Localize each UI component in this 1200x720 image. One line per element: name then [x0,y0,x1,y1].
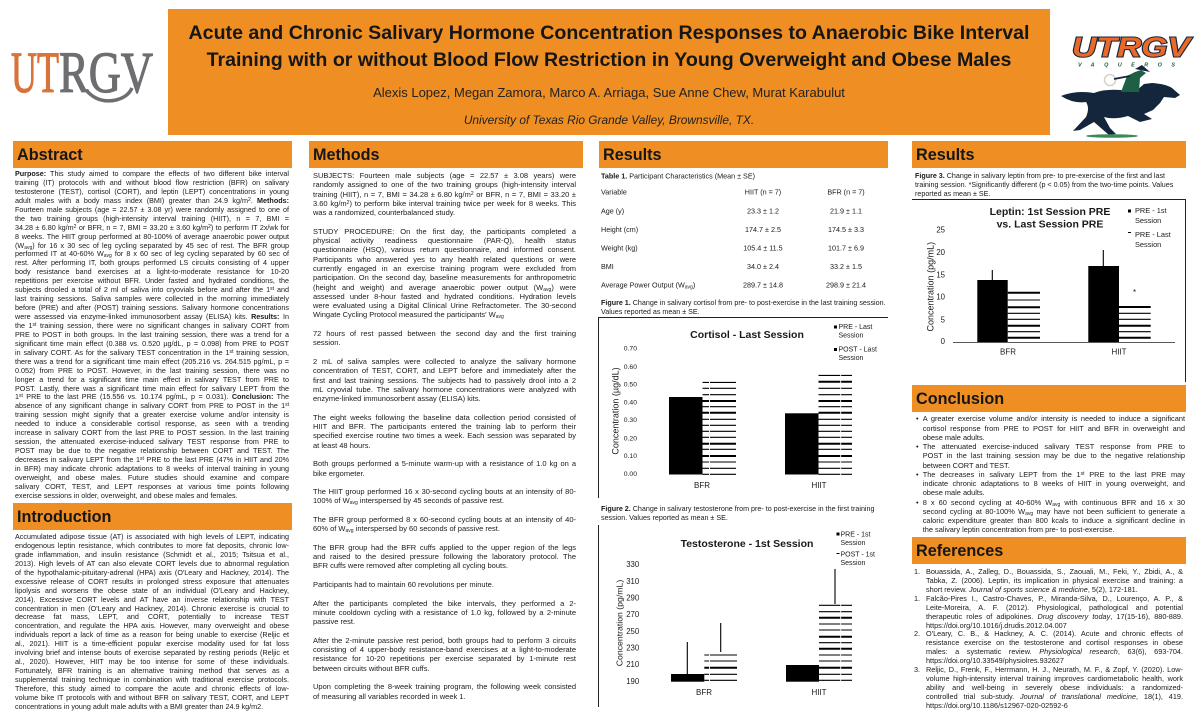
table: participant characteristics: ) [693,280,695,290]
methods text: session. [313,338,341,347]
abstract text: Purpose: This study aimed to compare the effects of two different bike interval [15,169,289,178]
methods text: minute cooldown cycling with a resistance of 1.0 kg, followed by a 2-minute [313,608,576,617]
methods text: 3.60 kg/m2) to perform bike interval training twice per week for 8 weeks. This [313,199,576,208]
chart: cortisol last session: PRE - Last [838,324,872,331]
panel: references [912,537,1186,710]
table: participant characteristics: Height (cm) [601,225,638,234]
abstract text: exercise sessions in older, overweight, and obese males and females. [15,491,238,500]
conclusion bullets: • [916,414,919,423]
conclusion bullets: obese male adults. [923,433,985,442]
heading: abstract [13,141,292,168]
heading: conclusion [912,385,1186,412]
introduction text: involving brief and intense bouts of exercise separated by resting periods (Reljic et [15,648,289,657]
title banner [168,9,1050,135]
methods text: Upon completing the 8-week training program, the following week consisted [313,682,576,691]
heading: abstract: Abstract [17,146,83,164]
abstract text: salivary CORT, TEST, and LEPT responses at various time points following [15,482,289,491]
table: participant characteristics: 105.4 ± 11.5 [743,244,783,252]
heading: introduction [13,503,292,530]
methods text: (height and weight) and average anaerobic power output (Wavg) were [313,283,576,293]
chart: cortisol last session: Session [838,332,864,340]
reference list: O'Leary, C. B., & Hackney, A. C. (2014). Acute and chronic effects of [926,629,1183,638]
methods text: between circuits without BFR cuffs. [313,664,430,673]
table: participant characteristics [601,172,866,290]
introduction text: lipolysis and worsens the obese state of an individual (O'Leary and Hackney, [15,586,289,595]
conclusion bullets: POST in the last training session may be due to the negative relationship [923,451,1185,460]
poster title: Training with or without Blood Flow Restriction in Young Overweight and Obese Males [207,48,1011,70]
chart: cortisol last session: Concentration (µg/dL) [610,367,620,455]
reference list: Bouassida, A., Zalleg, D., Bouassida, S., Zaouali, M., Feki, Y., Zbidi, A., & [926,567,1183,576]
chart: testosterone first session: 210 [626,660,640,669]
caption: figure 2: session. Values reported as mean ± SE. [601,514,728,522]
panel: introduction [13,503,292,711]
conclusion bullets: between CORT and TEST. [923,461,1010,470]
heading: methods: Methods [313,146,380,164]
abstract text: session, the attenuated exercise-induced salivary TEST response from PRE to [15,437,289,446]
introduction text: decrease fat mass, LEPT, and CORT, potentially to increase TEST [15,612,289,621]
heading: references: References [916,542,1003,560]
methods text [313,171,576,701]
abstract text: repetitions per exercise without BFR. Under fasted and hydrated conditions, the [15,276,289,285]
reference list: 1. [914,567,920,576]
heading: results (figure 3) [912,141,1186,168]
chart: leptin first vs last session: Session [1135,240,1161,249]
table: participant characteristics: Age (y) [601,206,624,216]
reference list: Falcão-Pires I., Castro-Chaves, P., Miranda-Silva, D., Lourenço, A. P., & [926,594,1183,603]
methods text: physical activity readiness questionnaire (PAR-Q), health status [313,236,576,245]
chart: cortisol last session: BFR [694,481,710,490]
abstract text: body resistance band exercises at a light-to-moderate resistance for 10-20 [15,267,289,276]
methods text: STUDY PROCEDURE: On the first day, the participants completed a [313,227,576,236]
heading: conclusion: Conclusion [916,390,1004,408]
chart: testosterone first session: BFR [696,688,712,697]
table: participant characteristics: 34.0 ± 2.4 [747,262,779,271]
caption: figure 1: Figure 1. Change in salivary cortisol from pre- to post-exercise in the last training session. [601,298,886,306]
methods text: of measuring all variables recorded in week 1. [313,692,466,701]
conclusion bullets: • [916,470,919,479]
abstract text: 34.28 ± 6.80 kg/m2 or BFR, n = 7, BMI = 33.20 ± 3.60 kg/m2) to perform IT 2x/wk for [15,223,289,232]
caption: figure 2 [601,504,874,522]
logo: UTRGV wordmark [11,46,153,105]
poster title: Acute and Chronic Salivary Hormone Concentration Responses to Anaerobic Bike Interval [189,22,1029,44]
chart: testosterone first session: PRE - 1st [840,532,871,538]
reference list: therapeutic roles of adipokines. Drug discovery today, 17(15-16), 880-889. [926,612,1183,621]
table: participant characteristics: 23.3 ± 1.2 [747,206,779,216]
chart: cortisol last session: 0.20 [624,436,637,442]
chart: leptin first vs last session: Leptin: 1st Session PRE [990,206,1110,218]
methods text: first and last training sessions. The subjects had to passively drool into a 2 [313,376,576,385]
reference list: resistance exercise on the testosterone and cortisol responses in obese [926,638,1183,647]
conclusion bullets: The attenuated exercise-induced salivary TEST response from PRE to [923,442,1185,451]
table: participant characteristics: BFR (n = 7) [827,188,865,196]
methods text: concentration of TEST, CORT, and LEPT before and immediately after the [313,366,576,375]
methods text: SUBJECTS: Fourteen male subjects (age = 22.57 ± 3.08 years) were [313,171,576,180]
chart: cortisol last session: 0.10 [624,453,637,460]
conclusion bullets: caloric expenditure greater than 800 kcals to induce a significant decline in [923,516,1185,525]
methods text: participation. On the second day, baseline measurements for anthropometric [313,273,576,282]
caption: figure 1 [601,298,886,316]
introduction text: endogenous leptin resistance, which contributes to more fat deposits, chronic low- [15,541,289,550]
introduction text: Fortunately, BFR training is an alternative training method that serves as a [15,666,289,675]
introduction text [15,532,289,711]
introduction text: 2013). High levels of AT can also elevate CORT levels due to abnormal regulation [15,559,289,568]
logo: UTRGV Vaqueros horse and rider: UTRGV [1072,32,1193,62]
chart: cortisol last session: Session [838,355,864,362]
abstract text: longer a trend for a significant time main effect in salivary TEST from PRE to [15,375,289,384]
chart: cortisol last session: 0.30 [624,417,637,424]
methods text: resistance for 10-20 repetitions per exercise separated by 1-minute rest [313,654,576,663]
table: participant characteristics: 289.7 ± 14.8 [743,280,783,290]
abstract text: 8 weeks. The HIIT group performed at 80-100% of average anaerobic power output [15,232,289,241]
chart: leptin first vs last session: HIIT [1111,348,1127,356]
chart: testosterone first session [598,525,875,707]
abstract text: overweight, and obese males. Future studies should examine and compare [15,473,289,482]
abstract text: needed to induce a considerable cortisol response, as seen with a trending [15,419,289,428]
chart: testosterone first session: Concentration (pg/mL) [614,580,624,666]
methods text: and raised to the desired pressure following the laboratory protocol. The [313,552,576,561]
introduction text: grade inflammation, and insulin resistance (Schmidt et al., 2015; Tsitsua et al., [15,550,289,559]
abstract text: before (PRE) and after (POST) training sessions. Salivary hormone concentrations [15,303,289,312]
reference list: males: a systematic review. Physiological research, 63(6), 693-704. [926,647,1183,656]
methods text: enzyme-linked immunosorbent assay (ELISA) kits. [313,394,481,403]
reference list: ability and well-being in severely obese individuals: a randomized- [926,683,1183,692]
methods text: 72 hours of rest passed between the second day and the first training [313,329,576,338]
introduction text: individuals report a lack of time as a reason for being unable to exercise (Reljic et [15,630,289,639]
methods text: at least 48 hours. [313,441,371,450]
chart: cortisol last session [598,317,888,498]
chart: testosterone first session: Testosterone - 1st Session [681,538,813,550]
abstract text: adult males with a body mass index (BMI) greater than 24.9 kg/m2. Methods: [15,196,289,205]
chart: cortisol last session: 0.00 [624,471,637,478]
conclusion bullets: indicate chronic adaptations to 8 weeks of HIIT in young overweight, and [923,479,1185,488]
reference list: Reljic, D., Frenk, F., Herrmann, H. J., Neurath, M. F., & Zopf, Y. (2020). Low- [926,665,1183,674]
methods text: BFR cuffs were removed after completing all cycling bouts. [313,561,508,570]
heading: results (table and figures 1-2): Results [603,146,661,164]
chart: leptin first vs last session: Concentration (pg/mL) [926,242,936,331]
reference list: https://doi.org/10.1186/s12967-020-02592-6 [926,701,1068,710]
chart: cortisol last session: 0.50 [624,382,637,388]
introduction text: Therefore, this study aimed to compare the acute and chronic effects of low- [15,684,289,693]
abstract text: Fourteen male subjects (age = 22.57 ± 3.08 yr) were randomly assigned to one of [15,205,289,214]
table: participant characteristics: 21.9 ± 1.1 [830,206,862,216]
reference list: volume high-intensity interval training improves cardiometabolic health, work [926,674,1183,683]
chart: testosterone first session: 270 [626,610,640,619]
table: participant characteristics: Average Power Output (W [601,280,685,290]
reference list: Leite-Moreira, A. F. (2012). Physiological, pathological and potential [926,603,1183,612]
table: participant characteristics: 33.2 ± 1.5 [830,262,862,271]
conclusion bullets: second cycling at 80-100% Wavg may have not been sufficient to generate a [923,507,1185,517]
chart: testosterone first session: 190 [626,677,640,686]
abstract text: increase in salivary CORT from the last PRE to POST session. In the last training [15,428,289,437]
conclusion bullets [916,414,1185,534]
reference list: Tabka, Z. (2006). Leptin, its implication in physical exercise and training: a [926,576,1183,585]
methods text: questionnaire (HSQ), various return questionnaire, and informed consent. [313,245,576,254]
methods text: training (HIIT), n = 7, BMI = 34.28 ± 6.80 kg/m2 or BFR, n = 7, BMI = 33.20 ± [313,190,576,199]
abstract text: rest. After performing IT, both groups performed LS circuits consisting of 4 upper [15,258,289,267]
methods text: Participants who answered yes to any health related questions or were [313,255,576,264]
chart: cortisol last session: HIIT [811,481,827,490]
chart: cortisol last session: 0.60 [624,364,637,371]
chart: testosterone first session: POST - 1st [840,552,875,558]
table: participant characteristics: BMI [601,262,614,271]
chart: leptin first vs last session: vs. Last Session PRE [997,218,1103,230]
caption: figure 2: Figure 2. Change in salivary testosterone from pre- to post-exercise in the first training [601,504,874,512]
chart: leptin first vs last session: 5 [941,316,946,324]
table: participant characteristics: 298.9 ± 21.4 [826,280,866,290]
chart: cortisol last session: 0.70 [624,346,637,352]
methods text: currently engaged in an exercise training program were excluded from [313,264,576,273]
introduction text: al., 2021). HIIT is a time-efficient popular exercise modality used for fat loss [15,639,289,648]
chart: leptin first vs last session [912,199,1186,382]
introduction text: Accumulated adipose tissue (AT) is associated with high levels of LEPT, indicating [15,532,289,541]
panel: abstract [13,141,292,500]
panel: methods [309,141,583,701]
chart: leptin first vs last session: BFR [1000,348,1016,356]
chart: testosterone first session: 250 [626,627,640,636]
methods text: was a randomized, counterbalanced study. [313,208,455,217]
chart: leptin first vs last session: PRE - 1st [1135,206,1167,215]
abstract text: 0.052) from PRE to POST. However, in the last training session, there was no [15,366,289,375]
heading: methods [309,141,583,168]
heading: references [912,537,1186,564]
methods text: assessed under 8-hour fasted and hydrated conditions. Hydration levels [313,292,576,301]
conclusion bullets: cortisol response from PRE to POST for HIIT and BFR in overweight and [923,424,1185,433]
introduction text: excessive release of CORT results in prolonged stress exposure that attenuates [15,577,289,586]
table: participant characteristics: Table 1. Participant Characteristics (Mean ± SE) [601,172,755,180]
reference list: short review. Journal of sports science & medicine, 5(2), 172-181. [926,585,1138,594]
panel: conclusion [912,385,1186,534]
chart: testosterone first session: HIIT [811,688,827,697]
methods text: HIIT and BFR. The participants entered the training lab to perform their [313,422,576,431]
table: participant characteristics: 101.7 ± 6.9 [828,244,864,252]
heading: introduction: Introduction [17,508,111,526]
reference list: https://doi.org/10.1016/j.drudis.2012.04.007 [926,621,1067,630]
methods text: The BFR group performed 8 x 60-second cycling bouts at an intensity of 40- [313,515,576,524]
methods text: The HIIT group performed 16 x 30-second cycling bouts at an intensity of 80- [313,487,576,496]
heading: results (table and figures 1-2) [599,141,888,168]
abstract text: 1st PRE to the last PRE (15.556 vs. 10.174 pg/mL, p = 0.031). Conclusion: The [15,392,289,401]
table: participant characteristics: avg [685,284,693,290]
methods text: 100% of Wavg interspersed by 45 seconds of passive rest. [313,496,504,506]
table: participant characteristics: HIIT (n = 7) [745,188,781,196]
abstract text: the 1st training session, there were no significant changes in salivary CORT from [15,321,289,330]
abstract text: the two training groups (high-intensity interval training (HIIT), n = 7, BMI = [15,214,289,223]
table: participant characteristics: 174.7 ± 2.5 [745,225,781,234]
logo: UTRGV Vaqueros horse and rider: VAQUEROS [1078,62,1175,68]
caption: figure 3: reported as mean ± SE. [915,190,990,198]
conclusion bullets: obese male adults. [923,488,985,497]
methods text: mL cryovial tube. The salivary hormone concentrations were analyzed with [313,385,576,394]
abstract text: training (IT) protocols with and without blood flow restriction (BFR) on salivary [15,178,289,187]
introduction text: supplemental training technique in combination with traditional exercise protocols. [15,675,289,684]
chart: testosterone first session: 230 [626,644,640,652]
abstract text: last training sessions. Saliva samples were collected in the morning immediately [15,294,289,303]
methods text: Both groups performed a 5-minute warm-up with a resistance of 1.0 kg on a [313,459,576,468]
methods text: Wingate Cycling Protocol measured the participants' Wavg [313,310,504,320]
methods text: were evaluated using a Digital Clinical Urine Refractometer. The 30-second [313,301,576,310]
caption: figure 3 [915,172,1174,198]
chart: leptin first vs last session: 15 [936,270,946,280]
abstract text: there was a trend for a significant time main effect (205.216 vs. 264.515 pg/mL, p = [15,357,289,366]
chart: leptin first vs last session: 0 [941,337,946,346]
abstract text: POST. Lastly, there was a significant time main effect for salivary LEPT from the [15,384,289,392]
abstract text: in salivary CORT. As for the salivary TEST concentration in the 1st training session, [15,348,289,357]
methods text: consisting of 4 upper-body resistance-band exercises at a light-to-moderate [313,645,576,654]
chart: leptin first vs last session: PRE - Last [1135,230,1171,239]
abstract text: testosterone (TEST), cortisol (CORT), and leptin (LEPT) concentrations in young [15,187,289,196]
chart: leptin first vs last session: Session [1135,216,1161,225]
methods text: passive rest. [313,617,355,626]
conclusion bullets: 8 x 60 second cycling at 40-60% Wavg with continuous BFR and 16 x 30 [923,498,1185,508]
reference list: controlled trial sub-study. Journal of translational medicine, 18(1), 419. [926,692,1183,701]
introduction text: 2014). Excessive CORT levels and AT have an inverse relationship with TEST [15,595,289,604]
abstract text: in BFR) may indicate chronic adaptations to 8 weeks of interval training in young [15,464,289,473]
methods text: bike ergometer. [313,468,365,478]
poster title [189,22,1029,70]
reference list: 3. [914,665,920,674]
introduction text: volume bike IT protocols with and without BFR on salivary TEST, CORT, and LEPT [15,693,289,702]
reference list: https://doi.org/10.33549/physiolres.932627 [926,656,1064,665]
methods text: The BFR group had the BFR cuffs applied to the upper region of the legs [313,543,576,552]
chart: leptin first vs last session: * [1133,288,1136,297]
abstract text [15,169,289,500]
table: participant characteristics: Variable [601,188,627,196]
abstract text: subjects drooled a total of 2 ml of saliva into cryovials before and after the 1st and [15,285,289,294]
caption: figure 3: training session. *Significantly different (p < 0.05) from the two-time points. Values [915,181,1173,189]
methods text: After the 2-minute passive rest period, both groups had to perform 3 circuits [313,636,576,645]
methods text: After the participants completed the bike intervals, they performed a 2- [313,599,576,608]
chart: leptin first vs last session: 25 [936,226,946,234]
methods text: The eight weeks following the baseline data collection period consisted of [313,413,576,422]
chart: cortisol last session: Cortisol - Last Session [690,329,804,341]
chart: testosterone first session: Session [840,560,866,567]
abstract text: performed IT at 40-60% Wavg for 8 x 60 sec of leg cycling separated by 60 sec of [15,249,289,259]
conclusion bullets: the salivary leptin concentration from pre- to post-exercise. [923,525,1115,534]
introduction text: al., 2020). However, HIIT may be too intense for some of these individuals. [15,657,289,666]
logo: UTRGV Vaqueros horse and rider [1061,32,1194,138]
introduction text: concentrations in young adult male adults with a BMI greater than 24.9 kg/m2. [15,702,263,711]
chart: cortisol last session: POST - Last [838,346,877,354]
conclusion bullets: • [916,498,919,507]
introduction text: concentration, and regulate the HPA axis. However, many overweight and obese [15,621,289,630]
methods text: randomly assigned to one of the two training groups (high-intensity interval [313,180,576,189]
authors: Alexis Lopez, Megan Zamora, Marco A. Arriaga, Sue Anne Chew, Murat Karabulut [373,84,845,100]
methods text: 2 mL of saliva samples were collected to analyze the salivary hormone [313,357,576,366]
affiliation: University of Texas Rio Grande Valley, Brownsville, TX. [464,113,754,127]
chart: leptin first vs last session: 10 [936,292,946,302]
reference list: 1. [914,594,920,603]
abstract text: PRE to POST in both groups. In the last training session, there was a trend for a [15,330,289,339]
introduction text: of the hypothalamic-pituitary-adrenal (HPA) axis (O'Leary and Hackney, 2014). The [15,568,289,577]
reference list [914,567,1184,710]
table: participant characteristics: 174.5 ± 3.3 [828,225,864,234]
conclusion bullets: The decreases in salivary LEPT from the 1st PRE to the last PRE may [923,470,1185,479]
chart: testosterone first session: 330 [626,560,640,569]
abstract text: were assessed via enzyme-linked immunosorbent assay (ELISA) kits. Results: In [15,312,289,321]
table: participant characteristics: Weight (kg) [601,244,638,252]
chart: cortisol last session: 0.40 [624,400,637,406]
reference list: 2. [914,629,920,638]
caption: figure 1: Values reported as mean ± SE. [601,308,700,316]
chart: leptin first vs last session: 20 [936,248,946,257]
introduction text: concentration in men (O'Leary and Hackney, 2014). Chronic exercise is crucial to [15,604,289,613]
heading: results (figure 3): Results [916,146,974,164]
caption: figure 3: Figure 3. Change in salivary leptin from pre- to pre-exercise of the first and last [915,172,1165,180]
methods text: specified exercise routine two times a week. Each session was separated by [313,431,576,440]
abstract text: (Wavg) for 16 x 30 sec of leg cycling separated by 45 sec of rest. The BFR group [15,240,289,250]
chart: testosterone first session: 310 [626,577,640,586]
abstract text: POST may be due to the negative relationship between CORT and TEST. The [15,446,289,455]
conclusion bullets: A greater exercise volume and/or intensity is needed to induce a significant [923,414,1185,423]
abstract text: decreases in salivary LEPT from the 1st PRE to the last PRE (47% in HIIT and 20% [15,455,289,464]
conclusion bullets: • [916,442,919,451]
abstract text: absence of any significant change in salivary CORT from PRE to POST in the 1st [15,401,289,410]
abstract text: significant time main effect (0.388 vs. 0.520 µg/dL, p = 0.098) from PRE to POST [15,339,289,348]
chart: testosterone first session: Session [840,540,866,547]
chart: testosterone first session: 290 [626,594,640,602]
methods text: 60% of Wavg interspersed by 60 seconds of passive rest. [313,524,500,534]
methods text: Participants had to maintain 60 revolutions per minute. [313,580,494,589]
abstract text: training session might signify that a greater exercise volume and/or intensity is [15,410,289,419]
